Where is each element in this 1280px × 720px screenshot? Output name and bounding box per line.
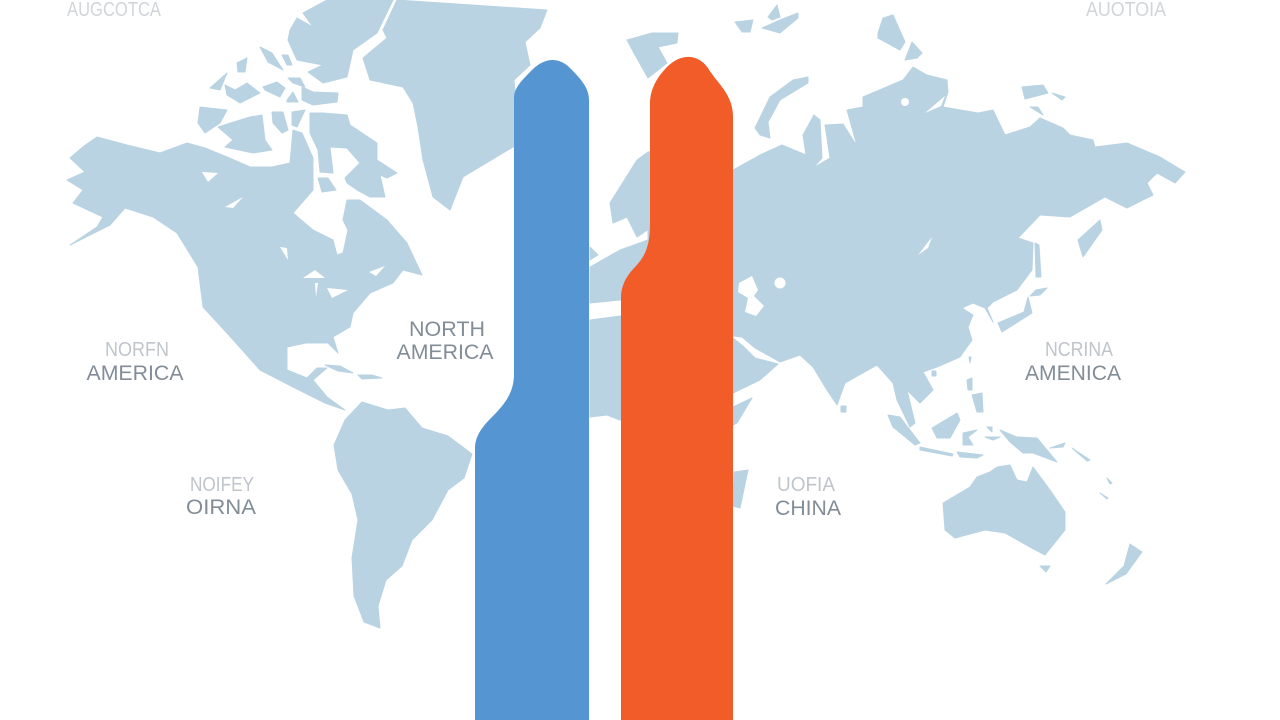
map: Canadian Arctic islands [198, 0, 393, 153]
label: right, america: NCRINA [1045, 339, 1114, 361]
bar: orange [621, 57, 733, 720]
map: northeast Canada and Baffin [310, 113, 397, 197]
label: right, china [775, 474, 841, 520]
label: right, america [1025, 339, 1121, 385]
label: left, north america: NORFN [105, 339, 169, 361]
label: right, china: UOFIA [777, 474, 836, 496]
map: Southeast Asia islands [841, 357, 1112, 499]
map: Arctic Ocean islands [627, 5, 1065, 138]
map: Madagascar [733, 470, 748, 508]
label: centre, north america: NORTH [409, 318, 485, 341]
map: Scandinavia [610, 150, 660, 237]
label: left lower: NOIFEY [190, 474, 254, 496]
map: Kamchatka and Sakhalin [1035, 220, 1102, 277]
map: Baffin south piece [318, 178, 336, 192]
map: Eurasia [590, 67, 1185, 427]
map: Arabia [700, 335, 778, 400]
map: British Isles [590, 247, 598, 260]
map: Japan [998, 288, 1047, 332]
map: lakes and inland water [202, 96, 945, 316]
map: Australia [943, 465, 1065, 555]
label: centre, north america: AMERICA [396, 341, 494, 364]
map: South America [334, 402, 472, 628]
map: North America [67, 130, 422, 410]
world map [67, 0, 1185, 628]
label: right, china: CHINA [775, 497, 841, 520]
bar: blue [475, 60, 589, 720]
label: left, north america [86, 339, 184, 385]
map: Horn of Africa [700, 398, 752, 440]
label: right, america: AMENICA [1025, 362, 1121, 385]
label: left lower [186, 474, 256, 519]
map: Greenland [363, 0, 547, 210]
map: Caribbean islands [325, 365, 382, 379]
label: centre, north america [396, 318, 494, 364]
map: New Zealand and Tasmania [1040, 544, 1142, 584]
label: left, north america: AMERICA [86, 362, 184, 385]
label: left lower: OIRNA [186, 496, 256, 519]
map: Africa [590, 316, 720, 420]
labels [67, 0, 1167, 520]
